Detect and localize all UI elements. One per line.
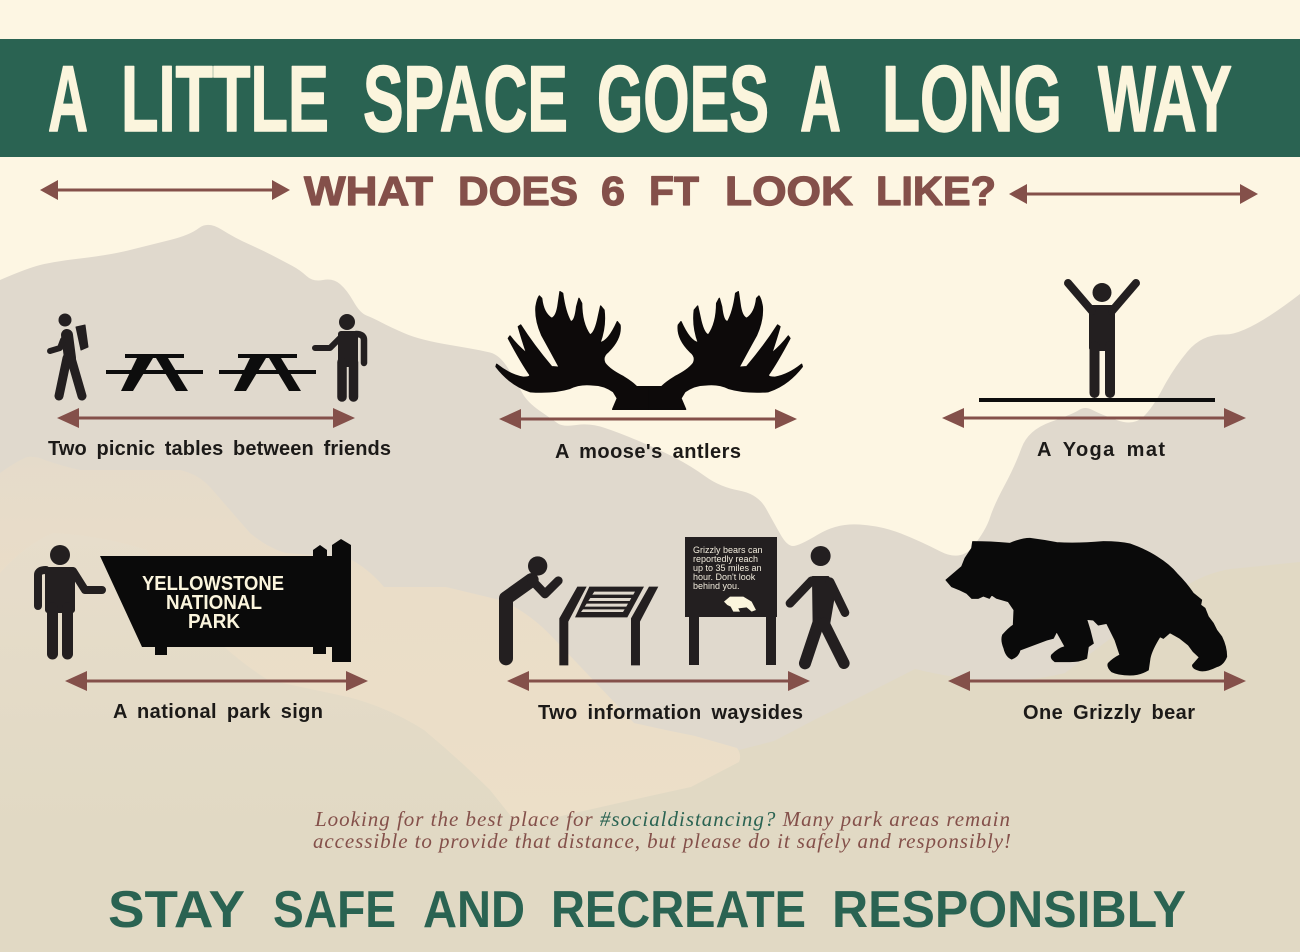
- sign copy: [693, 545, 763, 591]
- footer heading: RESPONSIBLY: [832, 881, 1186, 939]
- arrow: yoga width: [942, 408, 1246, 428]
- label: moose: A moose's antlers: [555, 441, 741, 463]
- icon: small bear: [724, 597, 756, 612]
- icon: person at sign: [38, 545, 102, 654]
- panel: moose antlers: [496, 292, 802, 463]
- panel: grizzly bear: [946, 538, 1246, 724]
- title: SPACE: [363, 46, 568, 151]
- label: picnic: Two picnic tables between friends: [48, 438, 391, 460]
- arrow: heading left: [40, 180, 290, 200]
- sign copy: Grizzly bears can: [693, 545, 763, 555]
- icon: yoga figure: [1068, 283, 1136, 393]
- background: lower left hills: [0, 533, 560, 952]
- panel: national park sign: [38, 539, 368, 723]
- icon: yoga mat: [979, 398, 1215, 402]
- background: lower right hills: [513, 562, 1300, 952]
- panel: picnic tables: [48, 314, 391, 460]
- heading: what does 6 ft look like: LOOK: [725, 168, 853, 214]
- sign copy: behind you.: [693, 581, 740, 591]
- label: yoga: A Yoga mat: [1037, 439, 1165, 461]
- title: A: [800, 46, 841, 151]
- heading: what does 6 ft look like: [304, 168, 996, 214]
- arrow: picnic width: [57, 408, 355, 428]
- text block: social distancing note: accessible to provide that distance, but please do it safely and responsibly!: [313, 829, 1011, 853]
- sign copy: hour. Don't look: [693, 572, 756, 582]
- title: WAY: [1098, 46, 1232, 151]
- footer heading: [108, 881, 1186, 939]
- footer heading: AND: [423, 881, 525, 939]
- arrow: sign width: [65, 671, 368, 691]
- icon: wayside sign: [685, 537, 777, 665]
- label: wayside: Two information waysides: [538, 702, 803, 724]
- heading: what does 6 ft look like: LIKE?: [876, 168, 996, 214]
- label: sign: A national park sign: [113, 701, 323, 723]
- arrow: moose width: [499, 409, 797, 429]
- label: bear: One Grizzly bear: [1023, 702, 1195, 724]
- title: GOES: [597, 46, 769, 151]
- icon: friend standing: [315, 314, 364, 397]
- icon: grizzly bear: [946, 538, 1227, 675]
- arrow: bear width: [948, 671, 1246, 691]
- icon: bending person: [506, 556, 558, 658]
- footer heading: STAY: [108, 881, 245, 939]
- sign text: PARK: [188, 611, 241, 633]
- title: [48, 46, 1232, 151]
- arrow: wayside width: [507, 671, 810, 691]
- text block: social distancing note: [313, 807, 1011, 853]
- icon: walking person: [790, 546, 845, 663]
- heading: what does 6 ft look like: 6: [601, 168, 625, 214]
- title: LONG: [882, 46, 1062, 151]
- text block: social distancing note: Looking for the best place for #socialdistancing? Many park areas remain: [314, 807, 1010, 831]
- background: sand ridge: [0, 457, 740, 830]
- title: LITTLE: [121, 46, 329, 151]
- arrow: heading right: [1009, 184, 1258, 204]
- icon: moose antlers: [496, 292, 802, 409]
- icon: picnic table one: [106, 354, 203, 391]
- title banner: [0, 39, 1300, 157]
- panel: information waysides: [506, 537, 845, 724]
- title: A: [48, 46, 88, 151]
- icon: hiker: [50, 314, 88, 396]
- sign text: YELLOWSTONE: [142, 573, 284, 595]
- footer heading: RECREATE: [551, 881, 806, 939]
- icon: picnic table two: [219, 354, 316, 391]
- icon: wayside table: [559, 587, 658, 665]
- background: grey mountains: [0, 225, 1300, 952]
- sign text: NATIONAL: [166, 592, 262, 614]
- heading: what does 6 ft look like: DOES: [458, 168, 578, 214]
- heading: what does 6 ft look like: WHAT: [304, 168, 433, 214]
- icon: park sign: [100, 539, 351, 662]
- footer heading: SAFE: [273, 881, 396, 939]
- panel: yoga mat: [942, 283, 1246, 461]
- sign copy: reportedly reach: [693, 554, 758, 564]
- sign text: [142, 573, 284, 633]
- heading: what does 6 ft look like: FT: [649, 168, 699, 214]
- sign copy: up to 35 miles an: [693, 563, 762, 573]
